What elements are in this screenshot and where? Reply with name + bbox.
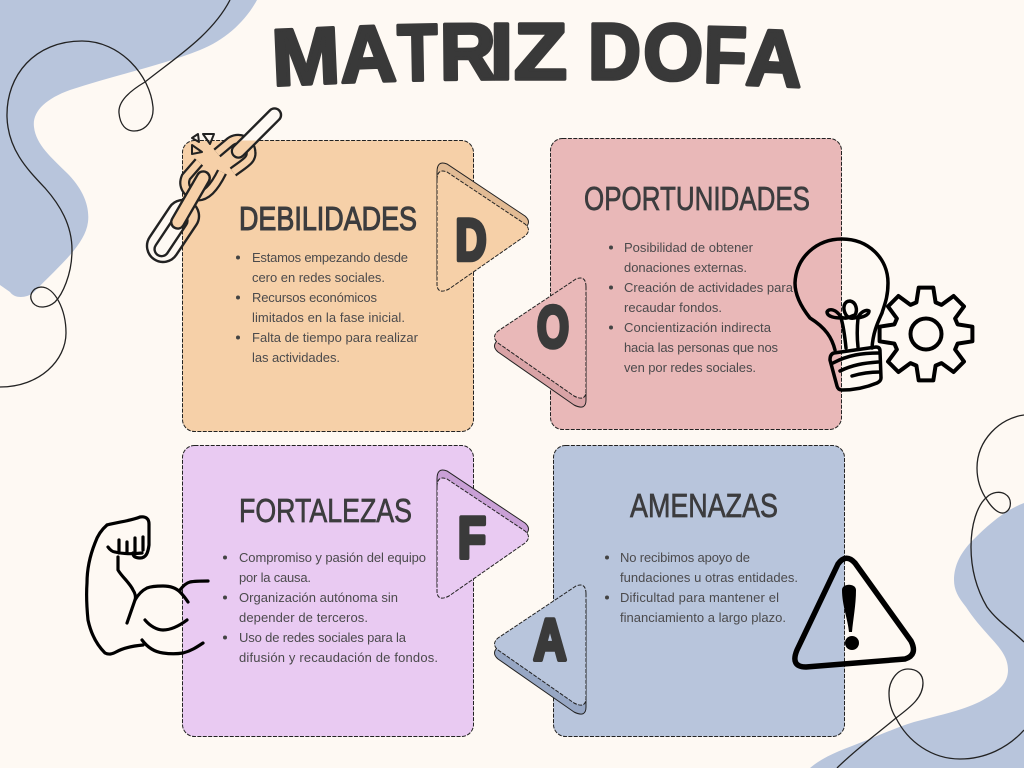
text block: amenazas: financiamiento a largo plazo.: [620, 610, 786, 625]
text block: oportunidades: Concientización indirecta: [624, 320, 772, 335]
icon: warning triangle: [795, 558, 913, 667]
title: T: [397, 8, 438, 97]
icon: broken chain: [141, 106, 284, 268]
icon: gear: [880, 288, 972, 380]
arrow: O: O: [537, 295, 569, 360]
text block: oportunidades: donaciones externas.: [624, 260, 747, 275]
title: A: [338, 9, 398, 99]
panel: fortalezas: [182, 446, 474, 736]
icon: light bulb: [795, 239, 888, 390]
text block: fortalezas: [223, 550, 438, 665]
text block: fortalezas: Organización autónoma sin: [239, 590, 398, 605]
background blob: top left: [0, 0, 257, 297]
background blob: bottom right: [810, 503, 1024, 768]
text block: fortalezas: depender de terceros.: [239, 610, 368, 625]
text block: amenazas: [605, 550, 798, 625]
text block: debilidades: Estamos empezando desde: [252, 250, 408, 265]
heading: amenazas: AMENAZAS: [630, 487, 778, 524]
text block: oportunidades: hacia las personas que nos: [624, 340, 778, 355]
text block: debilidades: [236, 250, 419, 365]
heading: fortalezas: FORTALEZAS: [239, 492, 412, 529]
title: I: [490, 7, 513, 96]
title: D: [588, 7, 641, 96]
text block: oportunidades: ven por redes sociales.: [624, 360, 756, 375]
panel: oportunidades: [550, 138, 842, 430]
title: R: [439, 7, 496, 96]
text block: amenazas: Dificultad para mantener el: [620, 590, 779, 605]
arrow: O: [494, 278, 586, 407]
title: A: [744, 13, 804, 104]
text block: debilidades: Recursos económicos: [252, 290, 378, 305]
title: F: [703, 10, 748, 100]
text block: debilidades: limitados en la fase inicial.: [252, 310, 405, 325]
text block: fortalezas: Compromiso y pasión del equipo: [239, 550, 426, 565]
text block: fortalezas: Uso de redes sociales para la: [239, 630, 407, 645]
text block: debilidades: cero en redes sociales.: [252, 270, 385, 285]
background line: top left: [0, 0, 230, 387]
title: Z: [514, 7, 567, 96]
text block: fortalezas: por la causa.: [239, 570, 311, 585]
arrow: A: A: [534, 608, 566, 673]
arrow: F: F: [458, 506, 486, 571]
text block: oportunidades: Posibilidad de obtener: [624, 240, 754, 255]
arrow: D: [437, 163, 528, 291]
text block: debilidades: las actividades.: [252, 350, 340, 365]
heading: debilidades: DEBILIDADES: [239, 200, 417, 237]
arrow: D: D: [456, 208, 486, 273]
panel: debilidades: [182, 140, 474, 432]
icon: flexed arm: [87, 517, 208, 654]
heading: oportunidades: OPORTUNIDADES: [584, 180, 810, 217]
text block: amenazas: No recibimos apoyo de: [620, 550, 750, 565]
text block: oportunidades: recaudar fondos.: [624, 300, 722, 315]
text block: amenazas: fundaciones u otras entidades.: [620, 570, 798, 585]
background line: bottom right: [837, 415, 1024, 768]
text block: oportunidades: Creación de actividades para: [624, 280, 794, 295]
arrow: A: [494, 585, 586, 714]
text block: debilidades: Falta de tiempo para realizar: [252, 330, 419, 345]
title: [270, 7, 804, 104]
text block: fortalezas: difusión y recaudación de fondos.: [239, 650, 438, 665]
panel: amenazas: [554, 446, 844, 736]
text block: oportunidades: [609, 240, 794, 375]
title: O: [643, 8, 704, 97]
arrow: F: [437, 470, 528, 598]
title: M: [270, 11, 342, 102]
